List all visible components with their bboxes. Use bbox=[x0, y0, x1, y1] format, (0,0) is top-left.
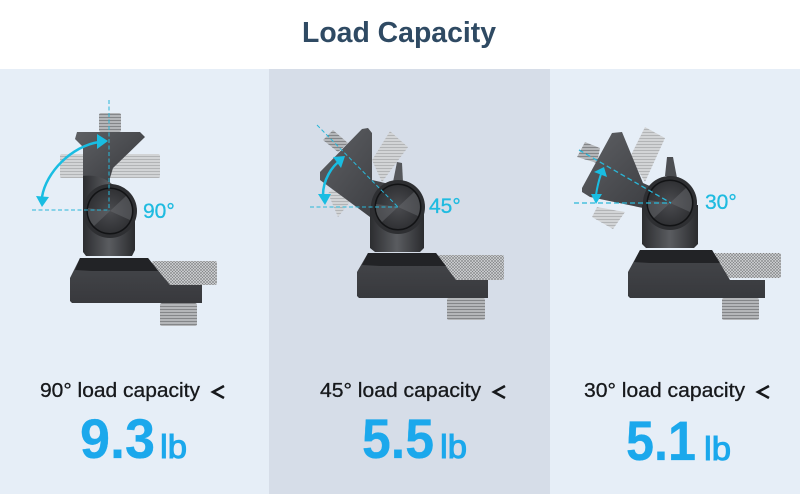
load capacity label: 30° load capacity bbox=[584, 380, 745, 402]
arrow: 45 degree arc bbox=[318, 156, 345, 205]
load value: 9.3 bbox=[80, 407, 155, 470]
title: Load Capacity bbox=[302, 17, 496, 49]
load value: 5.5 bbox=[362, 407, 434, 470]
load capacity label: 90° load capacity bbox=[40, 380, 200, 402]
load capacity label: 45° load capacity bbox=[320, 380, 481, 402]
load value: lb bbox=[440, 428, 467, 465]
load value: lb bbox=[704, 430, 731, 467]
arrow: 30 degree arc bbox=[591, 167, 607, 204]
angle label: 90° bbox=[143, 200, 175, 223]
angle guide lines bbox=[32, 100, 110, 211]
arrow: 90 degree arc bbox=[36, 134, 108, 207]
panel: 45 degrees bbox=[269, 69, 550, 494]
icon: mount at 90 degrees bbox=[60, 113, 217, 326]
panel: 30 degrees bbox=[550, 69, 800, 494]
panel: 90 degrees bbox=[0, 69, 269, 494]
angle guide lines bbox=[310, 125, 398, 207]
load value: lb bbox=[160, 428, 187, 465]
load value: 5.1 bbox=[626, 409, 696, 472]
angle label: 30° bbox=[705, 191, 737, 214]
angle label: 45° bbox=[429, 195, 461, 218]
icon: mount at 30 degrees bbox=[577, 127, 781, 320]
icon: mount at 45 degrees bbox=[320, 128, 504, 320]
angle guide lines bbox=[574, 150, 671, 203]
